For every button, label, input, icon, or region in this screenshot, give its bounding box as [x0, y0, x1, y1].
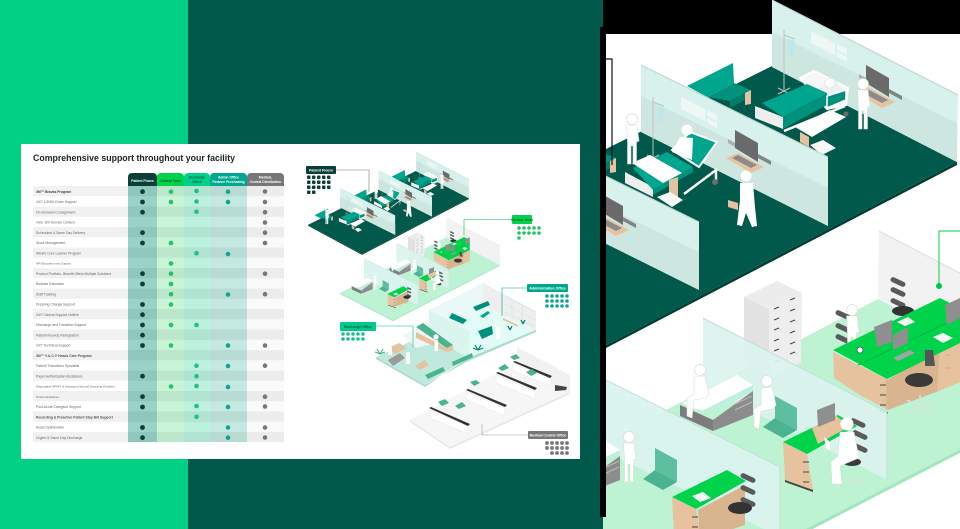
row labels: What's Core Learner Program: [36, 252, 81, 256]
label: clinical team: [464, 215, 541, 240]
row labels: Discharge and Transition Support: [36, 323, 86, 327]
leader line: patient floors: [606, 58, 613, 165]
label: clinical team: Clinical Team: [511, 218, 533, 222]
isometric: medical central distribution: [410, 347, 570, 449]
row labels: 3M™ V.A.C.® Heads Care Program: [36, 354, 92, 358]
row labels: Payer Authorization Assistance: [36, 374, 83, 378]
row labels: Patient Rounds Participation: [36, 334, 79, 338]
row labels: Urgent & Same Day Discharge: [36, 436, 82, 440]
row labels: Bedside Education: [36, 282, 64, 286]
row labels: 3M™ Bravas Program: [36, 190, 71, 194]
row labels: Post-Acute Caregiver Support: [36, 405, 81, 409]
background: enlarged detail area: [603, 0, 960, 529]
dots: admin office: [226, 189, 230, 440]
isometric: discharge and administration offices: [375, 283, 536, 387]
label: patient floors: Patient Floors: [309, 168, 333, 172]
label: discharge office: Discharge Office: [344, 325, 372, 329]
background: green band: [0, 0, 188, 529]
row labels: Patient Transitions Specialist: [36, 364, 79, 368]
column headers: Office: [192, 180, 202, 184]
row labels: Disposable NPWT & Advanced Wound Dressing Portfolio: [36, 385, 115, 389]
row labels: [36, 190, 115, 440]
label: medical central distribution: [482, 424, 569, 455]
row labels: Product Portfolio, Benefit Offers Multiple Solutions: [36, 272, 111, 276]
background: dark green band: [188, 0, 603, 529]
isometric: patient floors and clinical team: [308, 152, 500, 321]
row labels: Asset Optimization: [36, 426, 64, 430]
row labels: Recording & Proactive Patient Stay Bill Support: [36, 416, 114, 420]
row labels: 24/7 1-800# Order Support: [36, 200, 77, 204]
label: administration office: Administration Office: [529, 286, 566, 290]
dots: medical central distribution: [263, 189, 267, 440]
row labels: Onsite Assistance: [36, 395, 59, 399]
column headers: Patient Floors: [131, 179, 154, 183]
row labels: On-Demand Consignment: [36, 210, 75, 214]
column headers: Discharge: [189, 176, 205, 180]
column headers: Central Distribution: [250, 180, 281, 184]
black edge strip: [600, 0, 606, 517]
row labels: Staff Training: [36, 292, 56, 296]
dots: discharge office: [194, 189, 199, 419]
row labels: HPI Education and Support: [36, 262, 71, 266]
column headers: [128, 173, 284, 186]
column headers: Admin Office: [218, 176, 239, 180]
enlarged isometric detail: [603, 0, 960, 529]
row labels: Scheduled & Same Day Delivery: [36, 231, 85, 235]
row labels: Dressing Change Support: [36, 303, 75, 307]
title: Comprehensive support throughout your facility: [33, 153, 236, 164]
leader line: clinical team: [936, 231, 960, 289]
dots: patient floors: [140, 189, 145, 440]
label: medical central distribution: Medical Central Office: [530, 433, 566, 437]
dots: clinical team: [169, 189, 173, 389]
table: support matrix: [33, 173, 284, 442]
label: discharge office: [340, 322, 413, 347]
row labels: Stock Management: [36, 241, 65, 245]
column headers: Medical,: [259, 176, 272, 180]
panel: comprehensive support: [21, 144, 580, 459]
column headers: Clinical Team: [160, 179, 181, 183]
row labels: 24/7 Technical Support: [36, 344, 70, 348]
row labels: 24/7 Clinical Support Hotline: [36, 313, 79, 317]
label: patient floors: [306, 166, 369, 194]
column headers: Finance Purchasing: [212, 180, 245, 184]
label: administration office: [502, 284, 569, 316]
row labels: Over 100 Service Centers: [36, 221, 75, 225]
